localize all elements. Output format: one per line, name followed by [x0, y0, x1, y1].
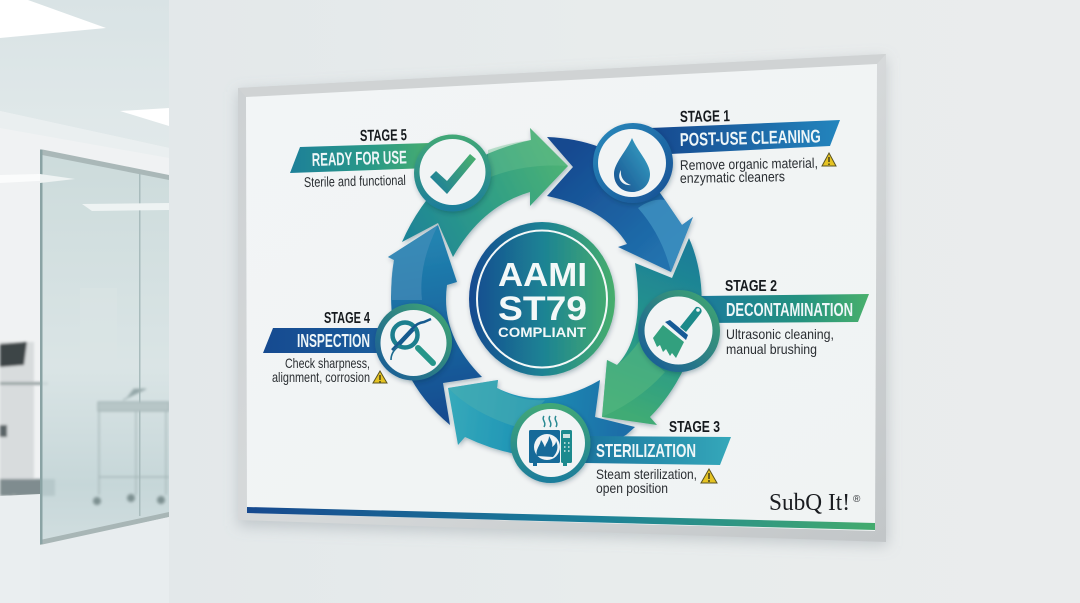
glass partition: [40, 149, 169, 546]
icon: warning stage 3: [701, 469, 717, 483]
node: stage 2 brush: [638, 290, 720, 372]
cart: [93, 389, 169, 505]
banner: stage 1: [650, 108, 840, 155]
icon: magnifier with instrument: [391, 319, 433, 363]
stage 2 description: [726, 326, 834, 357]
logo: SubQ It!: SubQ It!: [769, 490, 850, 516]
poster frame: [238, 54, 886, 542]
banner: stage 4: [263, 310, 395, 353]
arrow: stage 5 to stage 1: [402, 128, 568, 257]
icon: check mark: [430, 154, 476, 194]
arrow: stage 2 to stage 3: [602, 238, 702, 425]
stage 4 description: Check sharpness,: [285, 355, 370, 371]
icon: warning stage 1: [822, 153, 836, 166]
stage 1 title: POST-USE CLEANING: [680, 125, 821, 150]
stage 3 title: STERILIZATION: [596, 440, 696, 461]
banner: stage 2: [700, 278, 869, 323]
background: clinical room seen through opening: [0, 0, 169, 603]
stage 4 description: alignment, corrosion: [272, 369, 370, 385]
footer gradient bar: [247, 507, 875, 530]
medallion standard: ST79: [498, 290, 587, 328]
icon: steam sterilizer: [529, 416, 572, 466]
stage 3 description: open position: [596, 480, 668, 496]
stage 4 title: INSPECTION: [297, 330, 370, 351]
stage 5 label: STAGE 5: [360, 127, 407, 145]
stage 1 description: Remove organic material,: [680, 155, 818, 173]
poster frame shadow: [238, 58, 888, 546]
cycle ring of five arrows: [0, 0, 702, 457]
stage 1 description: enzymatic cleaners: [680, 168, 785, 186]
stage 4 label: STAGE 4: [324, 310, 370, 327]
node: stage 1 drop: [593, 123, 673, 203]
arrow: stage 3 to stage 4: [448, 380, 635, 457]
stage 5 title: READY FOR USE: [312, 146, 407, 170]
medallion compliant: COMPLIANT: [498, 324, 586, 340]
node: stage 5 check: [414, 134, 491, 212]
banner: stage 5: [290, 127, 430, 173]
arrow: stage 1 to stage 2: [547, 137, 693, 272]
icon: water drop: [614, 138, 650, 192]
icon: warning stage 4: [373, 371, 387, 383]
banner: stage 3: [585, 419, 731, 465]
medallion title: AAMI: [498, 256, 587, 293]
stage 4 description: [272, 355, 370, 385]
stage 1 label: STAGE 1: [680, 108, 730, 126]
node: stage 3 sterilizer: [510, 403, 590, 483]
stage 2 label: STAGE 2: [725, 278, 777, 295]
stage 2 description: manual brushing: [726, 341, 817, 357]
stage 3 description: [596, 466, 697, 496]
poster panel: [246, 64, 877, 531]
medical equipment: [0, 342, 55, 504]
stage 3 description: Steam sterilization,: [596, 466, 697, 482]
arrow: stage 4 to stage 5: [388, 225, 482, 425]
stage 2 description: Ultrasonic cleaning,: [726, 326, 834, 342]
stage 1 description: [680, 155, 818, 186]
stage 5 description: Sterile and functional: [304, 172, 406, 190]
stage 2 title: DECONTAMINATION: [726, 299, 853, 320]
icon: brush: [653, 307, 702, 358]
logo: SubQ It!: ®: [853, 494, 861, 505]
center medallion: [469, 222, 615, 376]
node: stage 4 magnifier: [375, 304, 452, 380]
stage 3 label: STAGE 3: [669, 419, 720, 436]
